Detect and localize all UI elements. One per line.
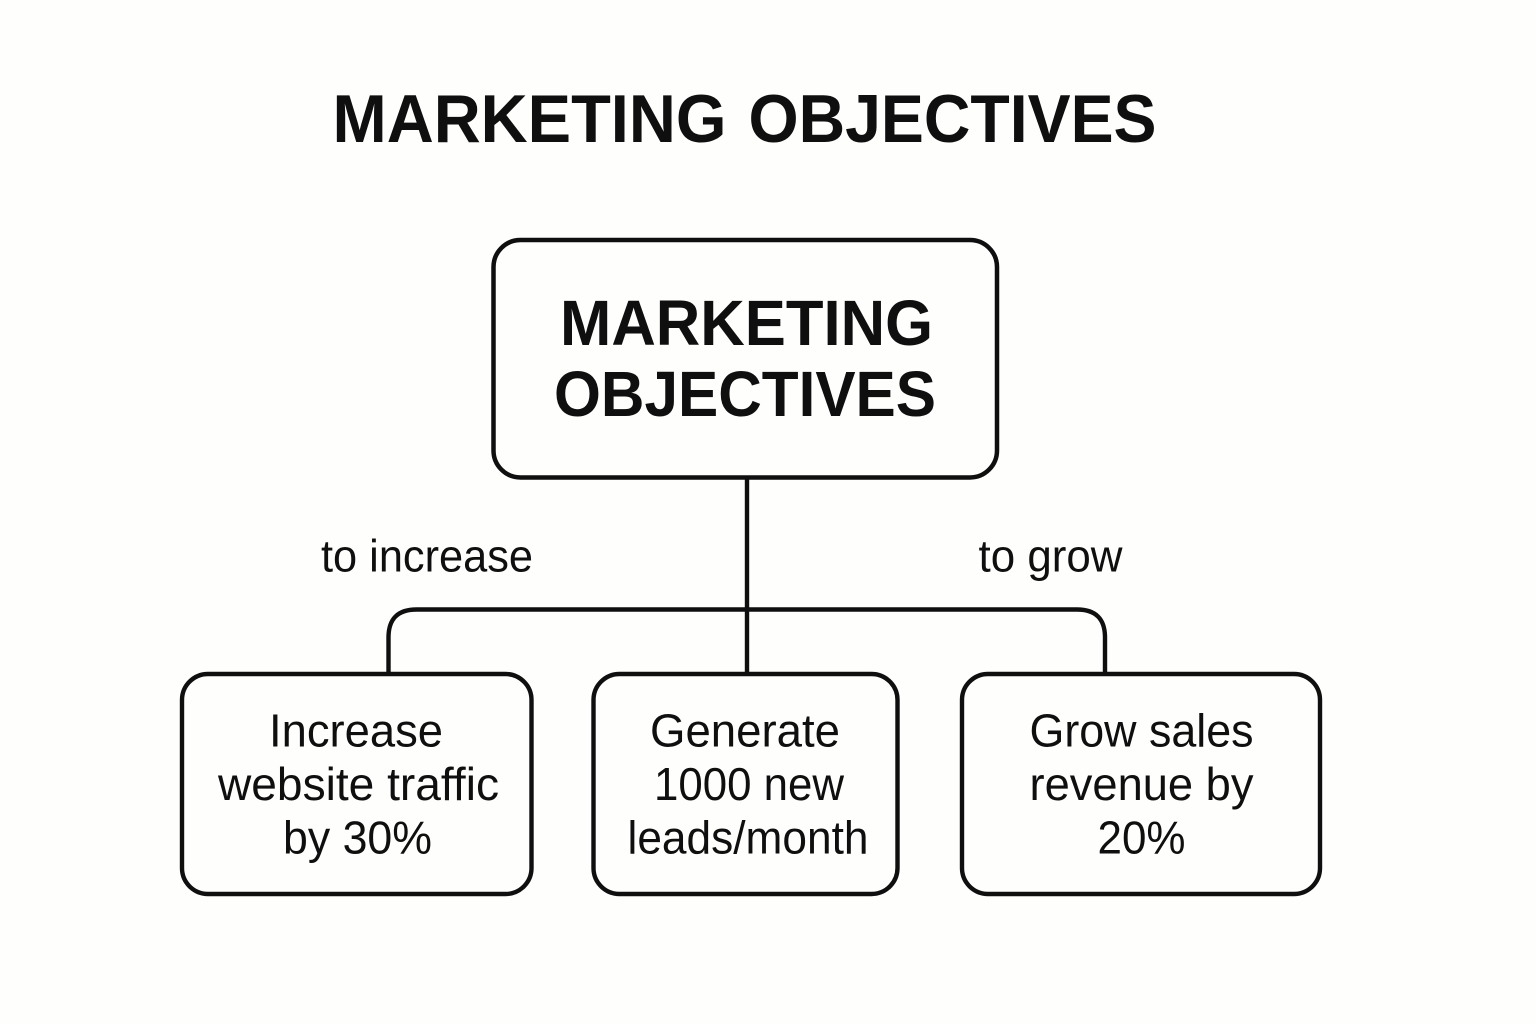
box: grow sales revenue: Grow sales: [1030, 704, 1254, 756]
top box: marketing objectives: OBJECTIVES: [554, 358, 936, 430]
box: increase website traffic: Increase: [269, 704, 443, 756]
connector lines: [388, 477, 1105, 674]
title: MARKETING: [332, 81, 726, 157]
box: generate leads: Generate: [650, 704, 840, 756]
title: OBJECTIVES: [748, 81, 1156, 157]
box: increase website traffic: website traffic: [217, 758, 499, 810]
label: to increase: to increase: [321, 530, 533, 582]
title: [332, 81, 1156, 157]
box: generate leads: 1000 new: [654, 758, 845, 810]
box: increase website traffic: by 30%: [283, 812, 432, 864]
box: grow sales revenue: [962, 674, 1320, 894]
box: grow sales revenue: revenue by: [1030, 758, 1254, 810]
box: increase website traffic: [182, 674, 532, 894]
label: to grow: to grow: [978, 530, 1123, 582]
box: grow sales revenue: 20%: [1098, 812, 1186, 864]
box: generate leads: [594, 674, 898, 894]
top box: marketing objectives: MARKETING: [560, 287, 933, 359]
top box: marketing objectives: [494, 240, 997, 478]
box: generate leads: leads/month: [628, 812, 868, 864]
